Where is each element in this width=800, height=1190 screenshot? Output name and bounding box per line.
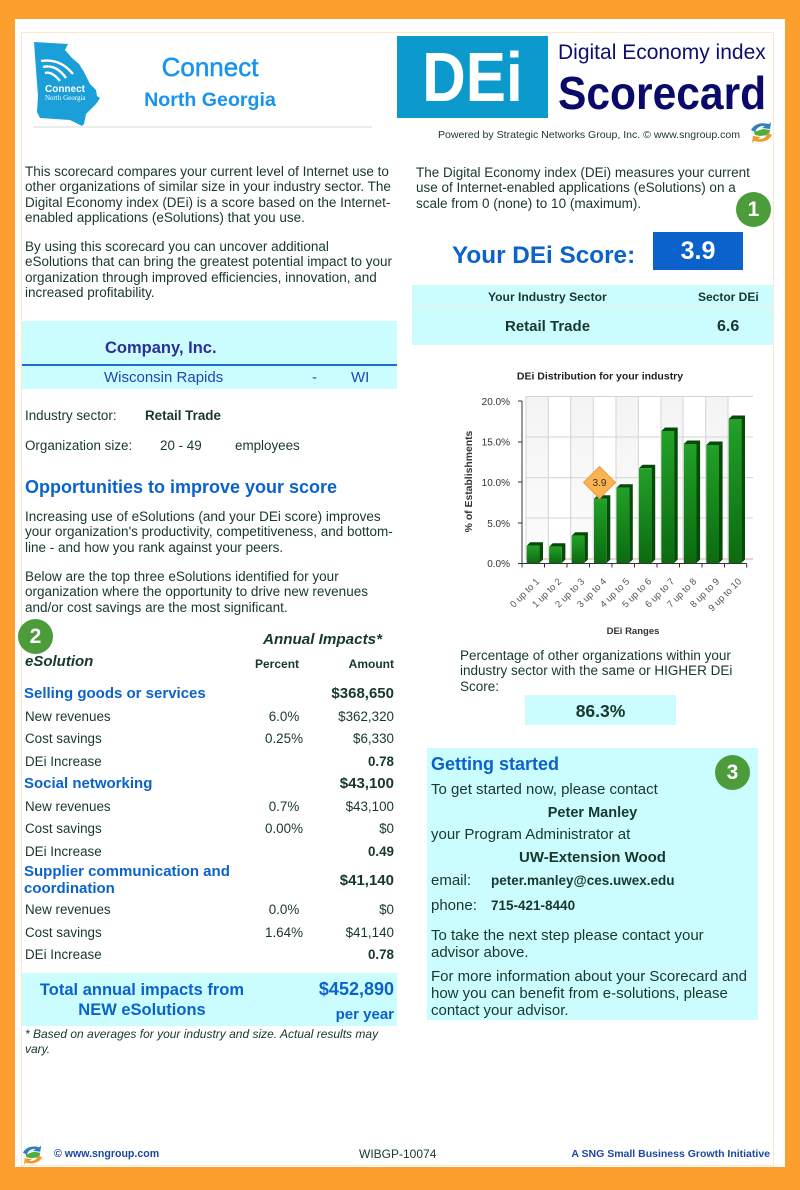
- axes: [518, 401, 747, 568]
- table group: selling goods or services: New revenues: [25, 709, 111, 724]
- bar chart: DEi distribution: [464, 370, 753, 637]
- score value box: [653, 232, 743, 270]
- unit: employees: [235, 438, 300, 453]
- bar chart: DEi distribution: 8 up to 9: [688, 576, 722, 610]
- table group: social networking: 0.00%: [265, 821, 303, 836]
- table group: social networking: 0.7%: [269, 799, 299, 814]
- badge 1: 1: [748, 198, 759, 221]
- organization: UW-Extension Wood: [519, 849, 666, 866]
- table group: social networking: Cost savings: [25, 821, 102, 836]
- bar chart: DEi distribution: DEi Ranges: [607, 626, 659, 637]
- table group: selling goods or services: $362,320: [338, 709, 394, 724]
- sector DEi value: 6.6: [717, 318, 739, 335]
- email label: email:: [431, 872, 471, 889]
- table group: supplier communication and coordination: DEi Increase: [25, 947, 102, 962]
- more information text: how you can benefit from e-solutions, please: [431, 985, 728, 1002]
- table group: social networking: DEi Increase: [25, 844, 102, 859]
- row title: [24, 863, 230, 897]
- location separator: -: [312, 369, 317, 386]
- bars: [527, 416, 745, 563]
- text block: opportunities paragraph two: [25, 569, 368, 615]
- table group: supplier communication and coordination: Cost savings: [25, 925, 102, 940]
- table group: supplier communication and coordination: [24, 863, 394, 962]
- DEi wordmark: DEi: [422, 38, 523, 116]
- table group: supplier communication and coordination: 0.0%: [269, 902, 299, 917]
- bar chart: DEi distribution: 5 up to 6: [620, 576, 654, 610]
- column heading: Percent: Percent: [255, 657, 299, 671]
- text block: opportunities paragraph two: organization where the opportunity to drive new revenues: [25, 584, 368, 599]
- logo text: North Georgia: North Georgia: [144, 89, 276, 111]
- contact prompt: To get started now, please contact: [431, 781, 658, 798]
- more information text: For more information about your Scorecard and: [431, 968, 747, 985]
- footer initiative: A SNG Small Business Growth Initiative: [571, 1148, 770, 1160]
- text block: intro paragraph one: other organizations of similar size in your industry sector. The: [25, 179, 391, 194]
- footnote: * Based on averages for your industry and size. Actual results may: [25, 1027, 378, 1041]
- text block: DEi definition: scale from 0 (none) to 10 (maximum).: [416, 196, 641, 211]
- badge 2: 2: [30, 625, 41, 648]
- table group: selling goods or services: 0.78: [368, 754, 394, 769]
- table heading: Annual Impacts: Annual Impacts*: [263, 631, 382, 648]
- divider line: [22, 364, 397, 366]
- bar chart: DEi distribution: 4 up to 5: [598, 576, 632, 610]
- panel: DEi blue tile: [397, 36, 548, 118]
- row title: Supplier communication and: [24, 863, 230, 880]
- heading: Getting started: [431, 754, 559, 774]
- row title: coordination: [24, 880, 115, 897]
- administrator line: your Program Administrator at: [431, 826, 630, 843]
- table group: supplier communication and coordination: 1.64%: [265, 925, 303, 940]
- more information text: [431, 968, 747, 1019]
- bar chart: DEi distribution: 10.0%: [482, 478, 510, 489]
- bar chart: DEi distribution: % of Establishments: [464, 430, 475, 532]
- table heading: eSolution: eSolution: [25, 653, 93, 670]
- text block: intro paragraph two: [25, 239, 392, 300]
- bar chart: DEi distribution: 1 up to 2: [530, 576, 564, 610]
- total amount: $452,890: [319, 979, 394, 999]
- next step text: To take the next step please contact your: [431, 927, 704, 944]
- table group: supplier communication and coordination: $0: [379, 902, 394, 917]
- bar chart: DEi distribution: 15.0%: [482, 438, 510, 448]
- table group: selling goods or services: $368,650: [331, 685, 394, 702]
- table group: selling goods or services: [24, 685, 394, 769]
- bar chart: DEi distribution: DEi Distribution for your industry: [517, 370, 683, 382]
- text block: opportunities paragraph one: your organization's productivity, competitiveness, and bottom-: [25, 524, 393, 539]
- heading: your DEi score: Your DEi Score:: [452, 242, 635, 269]
- sector DEi header: Sector DEi: [698, 290, 759, 304]
- footer code: WIBGP-10074: [359, 1147, 436, 1161]
- email value: peter.manley@ces.uwex.edu: [491, 873, 674, 888]
- text block: percentage description: Score:: [460, 679, 499, 694]
- table group: supplier communication and coordination: $41,140: [340, 872, 394, 889]
- row title: Selling goods or services: [24, 685, 206, 702]
- bar chart: DEi distribution: 5.0%: [487, 519, 510, 530]
- text block: intro paragraph one: This scorecard compares your current level of Internet use to: [25, 164, 389, 179]
- bar chart: DEi distribution: 6 up to 7: [643, 576, 677, 610]
- footnote: vary.: [25, 1042, 50, 1056]
- footer website: © www.sngroup.com: [54, 1148, 159, 1160]
- company location: Wisconsin Rapids: [104, 369, 223, 386]
- heading: Scorecard: Scorecard: [558, 67, 766, 119]
- sector name: Retail Trade: [505, 318, 590, 335]
- bar chart: DEi distribution: 2 up to 3: [553, 576, 587, 610]
- bar chart: DEi distribution: 20.0%: [482, 397, 510, 408]
- table group: supplier communication and coordination: 0.78: [368, 947, 394, 962]
- marker: your score: [584, 466, 616, 498]
- sector header: Your Industry Sector: [488, 290, 607, 304]
- footnote: [25, 1027, 379, 1056]
- percentage value box: 86.3%: [576, 701, 625, 721]
- state: WI: [351, 369, 369, 386]
- text block: opportunities paragraph two: and/or cost savings are the most significant.: [25, 600, 288, 615]
- organization size row: [25, 438, 300, 453]
- total label: NEW eSolutions: [78, 1001, 206, 1019]
- text block: intro paragraph two: eSolutions that can bring the greatest potential impact to your: [25, 254, 392, 269]
- powered by line: Powered by Strategic Networks Group, Inc. © www.sngroup.com: [438, 129, 740, 141]
- icon: Georgia state map with wifi: Connect: [45, 84, 86, 95]
- row title: Social networking: [24, 775, 152, 792]
- logo text: Connect: Connect: [162, 52, 258, 82]
- text block: DEi definition: [416, 165, 750, 211]
- table group: social networking: 0.49: [368, 844, 394, 859]
- table group: supplier communication and coordination: $41,140: [346, 925, 394, 940]
- text block: intro paragraph two: increased profitability.: [25, 285, 155, 300]
- table group: social networking: New revenues: [25, 799, 111, 814]
- phone label: phone:: [431, 897, 477, 914]
- phone value: 715-421-8440: [491, 898, 575, 913]
- table group: social networking: $43,100: [346, 799, 394, 814]
- text block: opportunities paragraph one: Increasing use of eSolutions (and your DEi score) improves: [25, 509, 381, 524]
- text block: intro paragraph one: Digital Economy index (DEi) is a score based on the Internet-: [25, 195, 390, 210]
- separator: [412, 306, 773, 308]
- table group: social networking: $43,100: [340, 775, 394, 792]
- administrator name: Peter Manley: [548, 805, 637, 821]
- logo shadow: [33, 126, 372, 128]
- bar chart: DEi distribution: 0.0%: [487, 559, 510, 570]
- text block: percentage description: Percentage of other organizations within your: [460, 648, 731, 663]
- table group: selling goods or services: DEi Increase: [25, 754, 102, 769]
- icon: Georgia state map with wifi: North Georgia: [45, 94, 86, 102]
- table group: selling goods or services: 0.25%: [265, 731, 303, 746]
- text block: intro paragraph two: By using this scorecard you can uncover additional: [25, 239, 329, 254]
- text block: DEi definition: The Digital Economy index (DEi) measures your current: [416, 165, 750, 180]
- more information text: contact your advisor.: [431, 1002, 569, 1019]
- panel: total annual impacts: [22, 973, 397, 1026]
- icon: SNG logo footer: [23, 1146, 42, 1164]
- badge 2: [18, 619, 53, 654]
- text block: intro paragraph one: enabled applications (eSolutions) that you use.: [25, 210, 305, 225]
- icon: SNG logo top: [751, 122, 772, 143]
- size value: 20 - 49: [160, 438, 202, 453]
- industry sector row: [25, 408, 221, 423]
- panel: industry sector: [412, 285, 773, 345]
- value: Retail Trade: [145, 408, 221, 423]
- footer: [23, 1146, 770, 1164]
- column heading: Amount: Amount: [349, 657, 394, 671]
- badge 1: [736, 192, 771, 227]
- bar chart: DEi distribution: 7 up to 8: [665, 576, 699, 610]
- panel: Connect North Georgia logo: [22, 33, 373, 129]
- badge 3: [715, 755, 750, 790]
- table group: selling goods or services: Cost savings: [25, 731, 102, 746]
- text block: intro paragraph one: [25, 164, 391, 225]
- marker: your score: 3.9: [593, 478, 607, 489]
- text block: opportunities paragraph one: line - and how you rank against your peers.: [25, 540, 283, 555]
- text block: opportunities paragraph one: [25, 509, 393, 555]
- badge 3: 3: [727, 761, 738, 784]
- bar chart: DEi distribution: 3 up to 4: [575, 576, 609, 610]
- total label: Total annual impacts from: [40, 981, 244, 999]
- table group: social networking: $0: [379, 821, 394, 836]
- text block: percentage description: industry sector with the same or HIGHER DEi: [460, 663, 732, 678]
- per year: per year: [336, 1006, 394, 1023]
- table group: selling goods or services: $6,330: [353, 731, 394, 746]
- percentage value box: [525, 695, 676, 725]
- score value box: 3.9: [681, 237, 715, 265]
- company name: Company, Inc.: [105, 339, 217, 357]
- bar chart: DEi distribution: 9 up to 10: [706, 576, 744, 614]
- panel: getting started: [427, 748, 758, 1020]
- next step text: [431, 927, 704, 961]
- panel: company details: [22, 321, 397, 389]
- table group: supplier communication and coordination: New revenues: [25, 902, 111, 917]
- heading: opportunities: Opportunities to improve your score: [25, 477, 337, 497]
- text block: DEi definition: use of Internet-enabled applications (eSolutions) on a: [416, 180, 736, 195]
- bar chart: DEi distribution: 0 up to 1: [508, 576, 542, 610]
- heading: Digital Economy index: Digital Economy index: [558, 41, 766, 64]
- total label: [40, 981, 244, 1019]
- text block: intro paragraph two: organization through improved efficiencies, innovation, and: [25, 270, 377, 285]
- next step text: advisor above.: [431, 944, 529, 961]
- icon: Georgia state map with wifi: [34, 42, 100, 126]
- text block: percentage description: [460, 648, 732, 694]
- text block: opportunities paragraph two: Below are the top three eSolutions identified for your: [25, 569, 339, 584]
- label: Organization size:: [25, 438, 132, 453]
- label: Industry sector:: [25, 408, 117, 423]
- table group: selling goods or services: 6.0%: [269, 709, 299, 724]
- table group: social networking: [24, 775, 394, 859]
